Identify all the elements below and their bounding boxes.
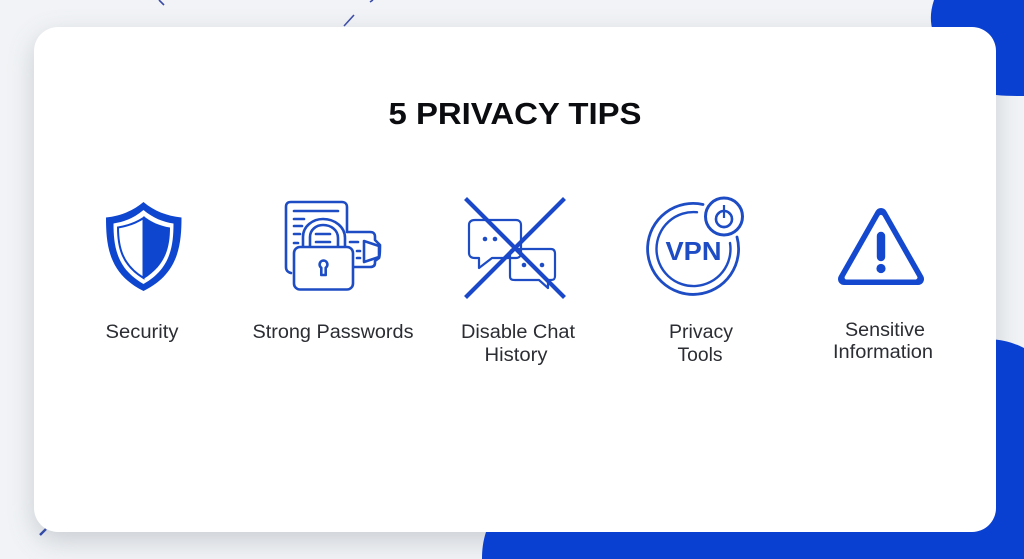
label: Privacy Tools xyxy=(669,322,734,366)
label: Security: Security xyxy=(106,322,179,343)
label: Sensitive Information xyxy=(833,320,933,363)
label: Sensitive Information: Information xyxy=(833,342,933,363)
label: Strong Passwords: Strong Passwords xyxy=(252,322,414,343)
label: Disable Chat History xyxy=(461,322,576,366)
icon: warning triangle xyxy=(844,214,918,279)
decorative line marks xyxy=(40,0,373,535)
icon: shield xyxy=(106,202,182,291)
label: Disable Chat History: History xyxy=(484,345,548,366)
label: Privacy Tools: Privacy xyxy=(669,322,734,343)
label: Privacy Tools: Tools xyxy=(678,345,722,366)
label: Sensitive Information: Sensitive xyxy=(845,320,925,341)
tip 4: privacy tools xyxy=(648,198,742,366)
tip 1: security xyxy=(106,202,182,343)
icon: crossed-out chat bubbles xyxy=(467,200,563,296)
icon: VPN ring with power badge: VPN xyxy=(666,236,722,266)
tip 2: strong passwords xyxy=(252,202,414,343)
tip 5: sensitive information xyxy=(833,214,933,363)
background shape: bottom-right blue sweep xyxy=(482,339,1024,559)
background shape: top-right blue circle xyxy=(931,0,1024,96)
icon: VPN ring with power badge xyxy=(648,198,742,294)
tip 3: disable chat history xyxy=(461,200,576,366)
title: 5 PRIVACY TIPS xyxy=(388,96,642,131)
label: Disable Chat History: Disable Chat xyxy=(461,322,576,343)
icon: document with padlock xyxy=(286,202,380,290)
